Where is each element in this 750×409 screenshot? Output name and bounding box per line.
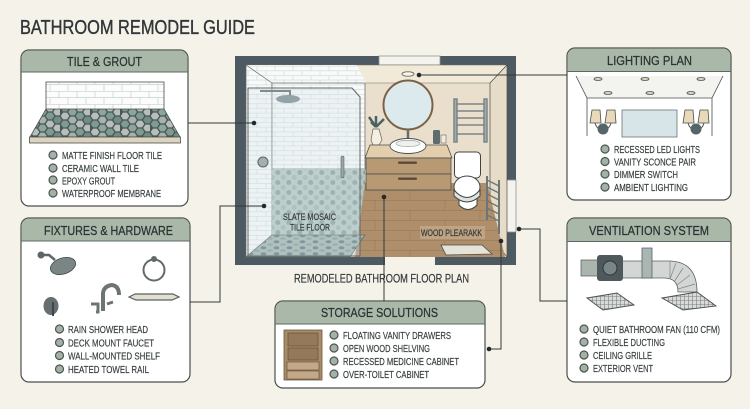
shower ceiling tile <box>246 65 366 83</box>
list: tile and grout items: WATERPROOF MEMBRANE <box>62 188 161 200</box>
list: ventilation items: EXTERIOR VENT <box>593 363 653 375</box>
list: tile and grout items: CERAMIC WALL TILE <box>62 163 139 175</box>
title: BATHROOM REMODEL GUIDE <box>20 17 255 39</box>
door gap <box>385 257 435 265</box>
icon: wall-mounted shelf <box>129 294 179 300</box>
shower left wall <box>246 65 272 257</box>
round mirror <box>384 80 432 130</box>
shower back wall tile <box>272 83 365 169</box>
icon: deck mount faucet <box>91 285 119 312</box>
list: tile and grout items: EPOXY GROUT <box>62 176 115 188</box>
panel: fixtures and hardware <box>21 218 190 382</box>
panel: tile and grout: TILE & GROUT <box>67 54 142 69</box>
vanity drawers <box>366 158 451 190</box>
shower floor label: TILE FLOOR <box>290 222 330 234</box>
window: right <box>506 180 516 232</box>
illustration: subway wall tile and hex floor <box>30 82 180 143</box>
recessed ceiling light <box>402 72 414 76</box>
vanity counter <box>365 145 452 158</box>
list: storage items <box>330 330 459 381</box>
panel: tile and grout <box>21 50 188 206</box>
panel: ventilation system <box>567 218 731 382</box>
connector lines <box>188 73 567 351</box>
list: fixtures items: RAIN SHOWER HEAD <box>68 324 148 336</box>
ceiling <box>246 65 507 83</box>
bath mat <box>441 245 492 255</box>
list: fixtures items: HEATED TOWEL RAIL <box>68 364 149 376</box>
sink and faucet <box>390 130 426 154</box>
shower floor <box>246 235 365 257</box>
panel: storage solutions: STORAGE SOLUTIONS <box>321 305 438 320</box>
wood floor label <box>420 226 485 239</box>
floor plan caption: REMODELED BATHROOM FLOOR PLAN <box>294 272 469 286</box>
window: top <box>379 56 440 65</box>
plant <box>369 116 384 145</box>
list: ventilation items <box>580 324 720 375</box>
icon: shower valve <box>44 297 58 316</box>
shower head <box>260 91 300 103</box>
list: storage items: OPEN WOOD SHELVING <box>343 343 430 355</box>
list: lighting items: VANITY SCONCE PAIR <box>614 156 696 168</box>
right wall <box>490 65 507 257</box>
door handle <box>341 156 344 178</box>
shower floor label: SLATE MOSAIC <box>283 212 336 223</box>
panel: fixtures and hardware: FIXTURES & HARDWARE <box>44 223 173 238</box>
shower valve <box>258 157 268 167</box>
floor plan <box>235 56 516 265</box>
illustration: fan, duct and grilles <box>581 248 716 310</box>
walls <box>235 56 516 265</box>
glass enclosure <box>248 88 360 256</box>
list: fixtures items: DECK MOUNT FAUCET <box>68 338 154 350</box>
list: storage items: OVER-TOILET CABINET <box>343 369 429 381</box>
soap dispenser <box>433 130 446 144</box>
list: lighting items <box>601 144 700 194</box>
list: lighting items: DIMMER SWITCH <box>614 169 678 181</box>
list: tile and grout items: MATTE FINISH FLOOR TILE <box>62 150 162 162</box>
toilet <box>454 152 480 210</box>
list: lighting items: RECESSED LED LIGHTS <box>614 144 700 156</box>
panel: ventilation system: VENTILATION SYSTEM <box>589 223 709 238</box>
icon: rain shower head <box>38 252 78 278</box>
illustration: over-toilet cabinet <box>284 330 322 380</box>
list: storage items: FLOATING VANITY DRAWERS <box>343 330 451 342</box>
list: fixtures items <box>56 324 160 376</box>
wood floor <box>355 183 505 257</box>
heated towel rail <box>487 176 499 234</box>
interior back wall <box>246 65 507 257</box>
towel rail on wall <box>454 99 487 142</box>
list: lighting items: AMBIENT LIGHTING <box>614 182 688 194</box>
illustration: ceiling, mirror and sconces <box>576 76 723 137</box>
list: storage items: RECESSED MEDICINE CABINET <box>343 356 459 368</box>
mosaic tile wall <box>272 169 365 235</box>
list: ventilation items: CEILING GRILLE <box>593 350 652 362</box>
panel: lighting plan: LIGHTING PLAN <box>607 53 692 68</box>
icon: towel ring <box>144 256 164 280</box>
panel: lighting plan <box>567 48 731 200</box>
list: fixtures items: WALL-MOUNTED SHELF <box>68 350 160 362</box>
list: tile and grout items <box>49 150 162 200</box>
shower floor label <box>283 212 336 234</box>
list: ventilation items: FLEXIBLE DUCTING <box>593 337 665 349</box>
panel: storage solutions <box>275 301 485 388</box>
wood floor label: WOOD PLEARAKK <box>421 228 482 239</box>
